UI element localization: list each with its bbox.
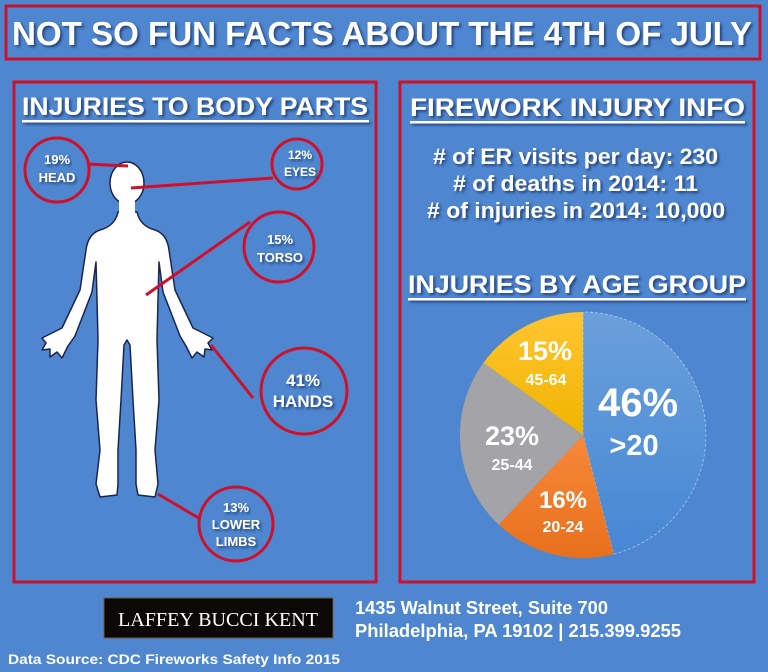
pie chart: age groups: 23% [485,421,539,451]
pie chart: age groups [460,312,706,558]
pie chart: age groups: 46% [598,381,678,425]
callout: hands 41% [261,348,347,434]
pie chart: age groups: 25-44 [492,457,533,474]
panel: firework injury info [400,82,754,582]
callout: lower limbs 13%: LIMBS [216,534,257,549]
callout: head 19%: 19% [44,152,70,167]
callout: eyes 12%: 12% [288,148,312,162]
callout: lower limbs 13%: 13% [223,500,249,515]
logo: Laffey Bucci Kent: LAFFEY BUCCI KENT [118,609,318,631]
pie chart: age groups: 16% [539,487,587,514]
logo: Laffey Bucci Kent [104,598,333,638]
address text: Philadelphia, PA 19102 | 215.399.9255 [355,621,681,641]
stats text: # of deaths in 2014: 11 [453,171,698,196]
pie chart: age groups: 20-24 [543,519,584,536]
callout: torso 15% [244,212,314,282]
callout: lower limbs 13%: LOWER [212,517,261,532]
callout lines [87,164,273,520]
callout: head 19%: HEAD [39,170,75,185]
pie chart: age groups: >20 [609,430,659,462]
stats text: # of ER visits per day: 230 [433,144,718,169]
callout: hands 41%: 41% [286,371,320,390]
callout: torso 15%: 15% [267,232,293,247]
callout: eyes 12% [272,139,322,189]
title [6,6,760,59]
data source: Data Source: CDC Fireworks Safety Info 2015 [8,651,340,667]
pie chart: age groups: 15% [518,336,572,366]
heading: injuries by age group: INJURIES BY AGE GROUP [408,271,746,299]
stats text: # of injuries in 2014: 10,000 [427,198,725,223]
body figure [42,162,213,497]
heading: injuries to body parts: INJURIES TO BODY PARTS [22,93,368,121]
stats text [427,144,725,223]
callout: eyes 12%: EYES [284,165,316,179]
heading: firework injury info: FIREWORK INJURY INFO [410,94,745,122]
callout: hands 41%: HANDS [273,392,333,411]
callout: torso 15%: TORSO [257,250,303,265]
title: NOT SO FUN FACTS ABOUT THE 4TH OF JULY [12,15,752,52]
callout: lower limbs 13% [199,487,273,561]
pie chart: age groups: 45-64 [526,372,567,389]
address text: 1435 Walnut Street, Suite 700 [355,598,608,618]
address text [355,598,681,641]
panel: injuries to body parts [14,82,376,582]
callout: head 19% [25,138,89,202]
